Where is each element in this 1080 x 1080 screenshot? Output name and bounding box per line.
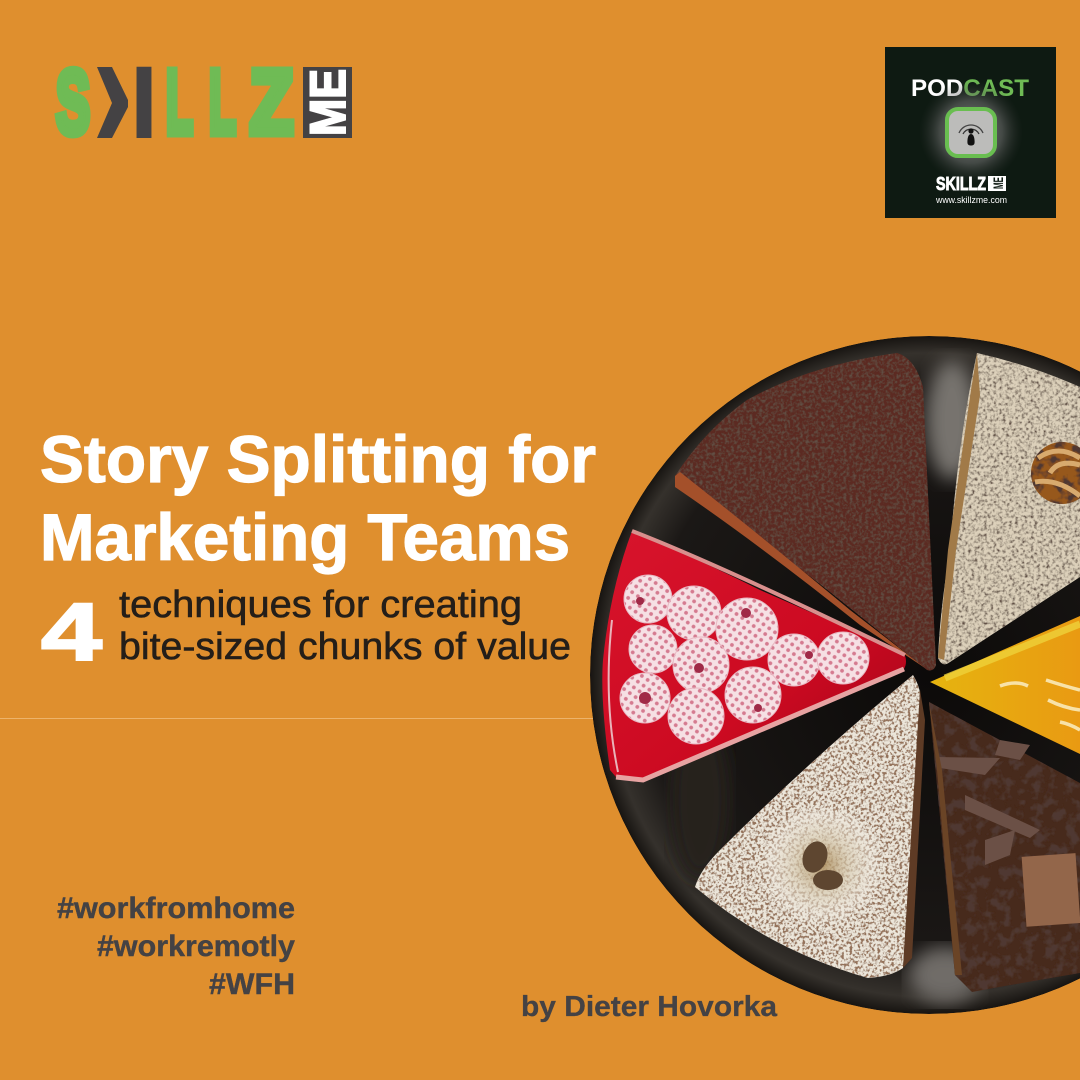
hashtags: #workfromhome <box>57 892 295 925</box>
logo: SKILLZ ME: Z <box>250 53 293 153</box>
hashtags: #WFH <box>209 968 295 1001</box>
hashtags <box>57 892 295 1001</box>
subtitle with number 4: techniques for creating <box>119 584 522 626</box>
slice: coffee cream cake <box>695 675 925 978</box>
slice: orange glazed cake <box>930 616 1080 754</box>
hashtags: #workremotly <box>97 930 295 963</box>
cake plate illustration <box>590 336 1080 1014</box>
subtitle with number 4 <box>41 584 571 678</box>
logo: SKILLZ ME: L <box>209 53 236 153</box>
podcast badge <box>885 47 1056 218</box>
title <box>40 422 596 574</box>
logo: SKILLZ ME: S <box>56 53 90 153</box>
author byline: by Dieter Hovorka <box>521 991 778 1023</box>
logo: SKILLZ ME: I <box>134 50 154 156</box>
raspberries <box>620 575 869 744</box>
subtitle with number 4: bite-sized chunks of value <box>119 626 571 668</box>
subtitle with number 4: 4 <box>41 587 103 678</box>
logo: SKILLZ ME: ME <box>300 69 356 136</box>
icon: microphone button <box>919 80 1023 184</box>
chocolate square <box>1022 853 1080 927</box>
slice: nut sponge cake <box>938 353 1080 664</box>
slice: chocolate cake <box>675 353 936 670</box>
badge heading: PODCAST <box>911 75 1029 102</box>
title: Story Splitting for <box>40 422 596 496</box>
badge url: www.skillzme.com <box>935 195 1007 205</box>
badge logo text: SKILLZ <box>936 174 986 194</box>
icon: logo chevron <box>97 67 128 138</box>
logo: SKILLZ ME <box>56 50 356 156</box>
coffee beans <box>802 841 843 890</box>
title: Marketing Teams <box>40 500 570 574</box>
slice: chocolate shavings cake <box>929 702 1080 992</box>
plate <box>590 336 1080 1014</box>
walnut <box>1031 442 1080 504</box>
logo: SKILLZ ME: L <box>166 53 193 153</box>
slice: raspberry cake <box>602 531 906 780</box>
podcast badge: ME <box>990 177 1006 189</box>
